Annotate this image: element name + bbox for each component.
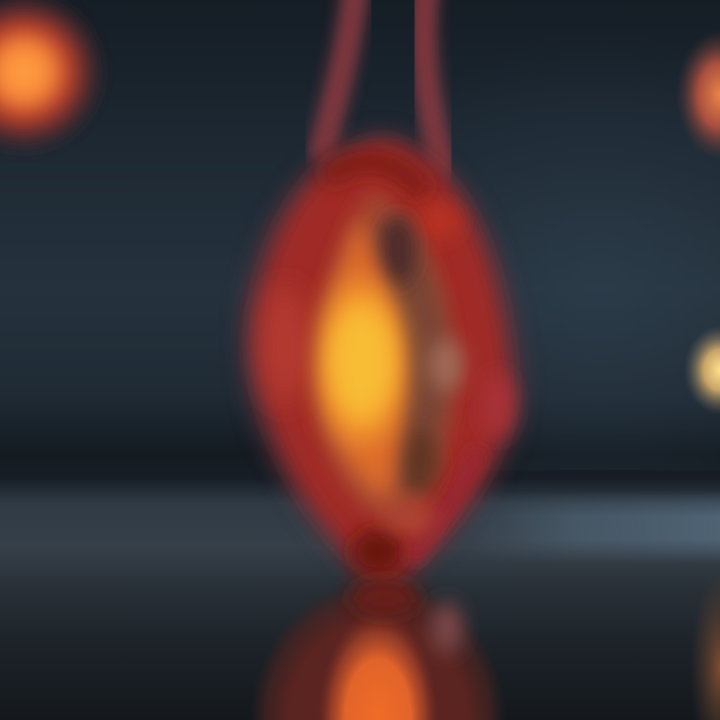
ring bottom dark knot — [350, 528, 406, 576]
interior: dark top shadow — [380, 214, 416, 286]
ring left highlight — [261, 285, 309, 405]
reflection flame — [318, 610, 438, 720]
right edge reflection — [690, 570, 720, 720]
ring top-right highlight — [412, 204, 460, 240]
interior: warm lens — [316, 190, 451, 525]
glow: right yellow light — [684, 325, 720, 415]
floor: reflective light band — [485, 494, 720, 560]
interior: pale highlight — [429, 339, 463, 391]
reflection top knot — [349, 580, 421, 616]
straps: two red cords above the ring — [322, 0, 442, 165]
ring halo — [240, 130, 524, 600]
ring body — [256, 142, 508, 585]
reflection pink highlight — [432, 602, 462, 654]
ring top dark band — [325, 162, 425, 195]
interior: brown band — [379, 215, 450, 498]
flame outer — [321, 215, 403, 497]
interior: lower shadow — [402, 428, 438, 496]
reflection body — [250, 578, 506, 720]
ring: pointed red loop with inner flame — [240, 130, 524, 600]
ring lower right stroke — [410, 450, 480, 560]
glow: top-left orange light — [0, 0, 106, 154]
interior: lower warm patch — [390, 502, 434, 534]
flame core — [322, 284, 402, 440]
ring right highlight — [482, 371, 514, 439]
reflection: ring mirrored on floor — [250, 570, 720, 720]
glow: right orange light — [676, 30, 720, 160]
